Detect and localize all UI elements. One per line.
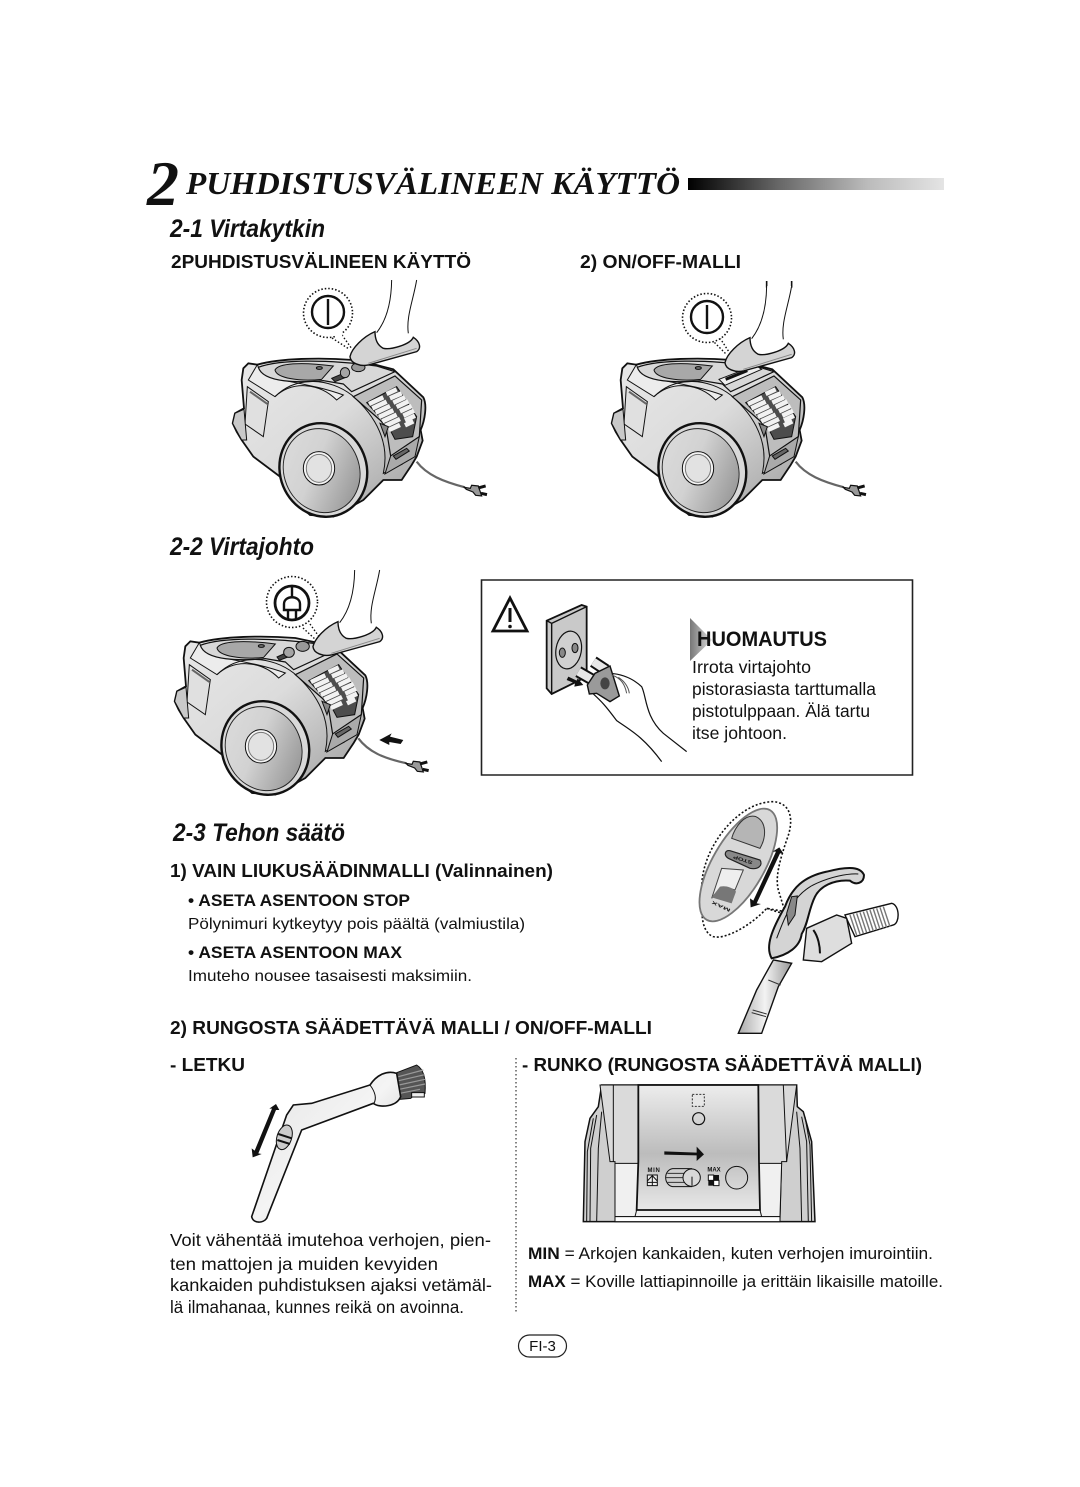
illustration: hose handle with slide control bbox=[684, 797, 898, 1033]
subheading: hose: - LETKU bbox=[170, 1054, 245, 1075]
page number bbox=[518, 1335, 566, 1357]
text: MIN explanation: MIN = Arkojen kankaiden, kuten verhojen imurointiin. bbox=[528, 1245, 933, 1263]
icon: grid indicator bbox=[692, 1094, 704, 1106]
illustration: vacuum cleaner with foot on on/off switch bbox=[612, 281, 866, 530]
illustration: vacuum cleaner with foot on cord rewind button bbox=[175, 570, 429, 808]
text: MAX explanation: MAX = Koville lattiapinnoille ja erittäin likaisille matoille. bbox=[528, 1273, 943, 1291]
callout heading: HUOMAUTUS bbox=[697, 628, 827, 651]
section heading: Puhdistusvälineen käyttö: 2 bbox=[146, 148, 179, 219]
subheading: slide control model: 1) VAIN LIUKUSÄÄDINMALLI (Valinnainen) bbox=[170, 860, 553, 881]
section heading: Puhdistusvälineen käyttö bbox=[146, 148, 944, 219]
subheading: body: - RUNKO (RUNGOSTA SÄÄDETTÄVÄ MALLI) bbox=[522, 1054, 922, 1075]
subheading: body controlled / on-off model: 2) RUNGOSTA SÄÄDETTÄVÄ MALLI / ON/OFF-MALLI bbox=[170, 1017, 652, 1038]
subheading: model 1: 2PUHDISTUSVÄLINEEN KÄYTTÖ bbox=[171, 251, 471, 272]
icon: grey triangle marker bbox=[690, 618, 712, 661]
instruction: set to stop bbox=[188, 892, 525, 933]
heading: 2-2 Virtajohto: 2-2 Virtajohto bbox=[169, 533, 314, 561]
heading: 2-1 Virtakytkin: 2-1 Virtakytkin bbox=[169, 215, 325, 243]
callout body text: pistotulppaan. Älä tartu bbox=[692, 701, 870, 721]
text: suction reduction tip: kankaiden puhdistuksen ajaksi vetämäl- bbox=[170, 1275, 492, 1295]
text: suction reduction tip bbox=[170, 1230, 492, 1317]
instruction: set to stop: Pölynimuri kytkeytyy pois päältä (valmiustila) bbox=[188, 916, 525, 933]
illustration: hose handle with air vent slider bbox=[252, 1065, 425, 1222]
callout panel: Huomautus bbox=[482, 580, 912, 775]
callout body text: pistorasiasta tarttumalla bbox=[692, 679, 876, 699]
illustration: vacuum body with suction control dial: MAX bbox=[707, 1167, 721, 1173]
page number: FI-3 bbox=[529, 1338, 556, 1355]
illustration: hose handle with slide control: STOP bbox=[733, 854, 753, 865]
section heading: Puhdistusvälineen käyttö: PUHDISTUSVÄLINEEN KÄYTTÖ bbox=[185, 165, 680, 201]
instruction: set to max: Imuteho nousee tasaisesti maksimiin. bbox=[188, 968, 472, 985]
text: suction reduction tip: ten mattojen ja muiden kevyiden bbox=[170, 1254, 438, 1274]
illustration: vacuum cleaner with foot on knob switch bbox=[233, 280, 487, 530]
heading: 2-3 Tehon säätö: 2-3 Tehon säätö bbox=[172, 819, 345, 847]
dotted column divider bbox=[515, 1058, 517, 1312]
icon: warning triangle bbox=[493, 598, 527, 631]
instruction: set to stop: • ASETA ASENTOON STOP bbox=[188, 892, 410, 910]
illustration: vacuum body with suction control dial: MIN bbox=[647, 1168, 660, 1174]
text: suction reduction tip: Voit vähentää imutehoa verhojen, pien- bbox=[170, 1230, 491, 1250]
instruction: set to max: • ASETA ASENTOON MAX bbox=[188, 944, 402, 962]
instruction: set to max bbox=[188, 944, 472, 985]
callout body text: Irrota virtajohto bbox=[692, 657, 811, 677]
illustration: vacuum body with suction control dial bbox=[583, 1085, 815, 1222]
callout body text: itse johtoon. bbox=[692, 723, 787, 743]
subheading: on/off model: 2) ON/OFF-MALLI bbox=[580, 251, 741, 272]
illustration: hand pulling plug from wall socket bbox=[547, 605, 687, 762]
text: suction reduction tip: lä ilmahanaa, kunnes reikä on avoinna. bbox=[170, 1297, 464, 1317]
callout body text bbox=[692, 657, 876, 743]
illustration: hose handle with slide control: MAX bbox=[711, 900, 731, 913]
